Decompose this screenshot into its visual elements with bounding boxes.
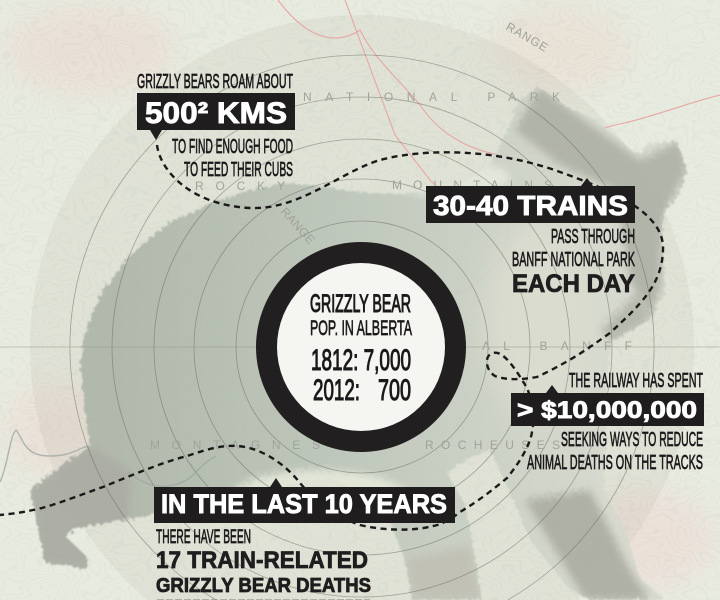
- callout: 500 square kms: [137, 71, 295, 181]
- map place labels: MOUNTAINS: [392, 178, 552, 192]
- map place labels: RANGE: [278, 205, 318, 247]
- map place labels: AL BANFF: [482, 339, 632, 353]
- concentric range rings: [70, 55, 654, 600]
- callout: deaths in last 10 years: GRIZZLY BEAR DEATHS: [156, 575, 371, 597]
- callout box with pointer: [154, 478, 455, 523]
- caption: TO FIND ENOUGH FOOD: [172, 136, 293, 158]
- central population badge: POP. IN ALBERTA: [310, 317, 412, 340]
- bear belly fade: [234, 466, 404, 487]
- death count: 17 TRAIN-RELATED: [156, 547, 368, 574]
- population figures: 1812: 7,000: [311, 344, 411, 377]
- callout: trains per day: [426, 178, 635, 298]
- badge heading: GRIZZLY BEAR: [310, 290, 411, 318]
- intro text: GRIZZLY BEARS ROAM ABOUT: [137, 71, 293, 93]
- bear silhouette: [30, 87, 688, 600]
- map place labels: NATIONAL PARK: [303, 90, 560, 104]
- black ring: [256, 242, 466, 452]
- callout box with pointer: [137, 93, 295, 140]
- central population badge: [256, 242, 466, 452]
- callout: deaths in last 10 years: [154, 478, 455, 597]
- map river: [0, 430, 216, 486]
- bear dark front leg: [525, 490, 650, 600]
- map place labels: [150, 19, 632, 452]
- big heading: IN THE LAST 10 YEARS: [161, 489, 447, 519]
- bear head light patch: [414, 163, 510, 198]
- lead text: THERE HAVE BEEN: [156, 527, 251, 548]
- central population badge: 700: [378, 374, 411, 407]
- map roads: [278, 0, 720, 296]
- callout: railway spending: [511, 370, 704, 474]
- big figure: > $10,000,000: [517, 397, 697, 424]
- central population badge: 2012:: [313, 374, 360, 407]
- callout box with pointer: [511, 385, 704, 426]
- map place labels: ROCHEUSES: [425, 438, 560, 452]
- map place labels: ROCKY: [195, 179, 285, 193]
- map place labels: RANGE: [504, 19, 550, 55]
- clipped line of text at bottom edge: [157, 598, 370, 600]
- big figure: 30-40 TRAINS: [433, 190, 628, 221]
- map grid line: [0, 346, 720, 348]
- callout: trains per day: EACH DAY: [512, 270, 635, 298]
- caption: PASS THROUGH: [551, 226, 635, 248]
- bear dark near leg: [410, 546, 480, 600]
- white disc: [277, 263, 445, 431]
- bear dark head: [515, 87, 687, 320]
- map place labels: MONTAGNES: [150, 438, 320, 452]
- bear lower neck band: [600, 294, 650, 342]
- callout: 500 square kms: TO FEED THEIR CUBS: [184, 159, 293, 181]
- big figure: 500² KMS: [145, 97, 287, 130]
- callout box with pointer: [426, 178, 635, 223]
- bear dark hind leg: [30, 445, 130, 569]
- dashed bear route: [0, 145, 663, 530]
